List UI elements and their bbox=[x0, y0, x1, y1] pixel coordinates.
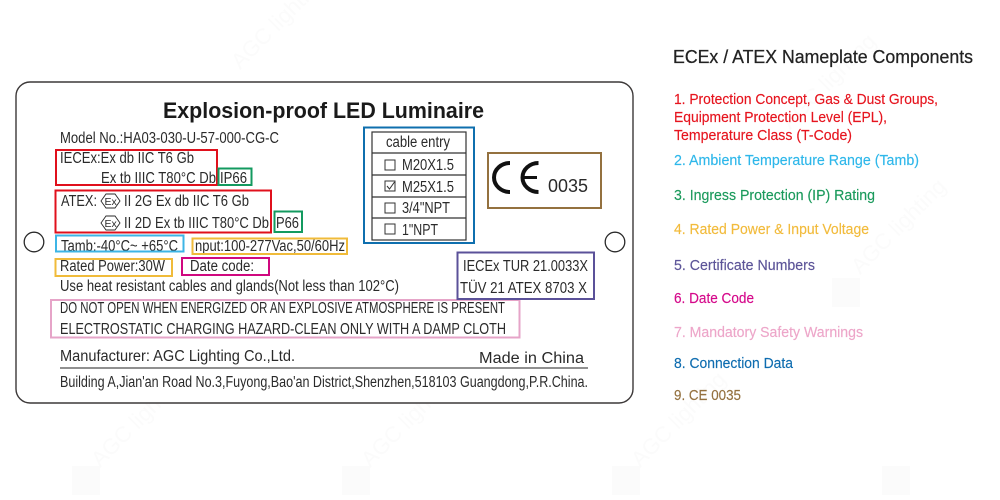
highlight: certificates bbox=[458, 252, 594, 299]
ATEX marking bbox=[61, 193, 269, 232]
legend item 9: 9. CE 0035 bbox=[674, 388, 741, 404]
ambient temperature text: Tamb:-40°C~ +65°C bbox=[61, 238, 178, 255]
legend item 8: 8. Connection Data bbox=[674, 356, 794, 372]
rated power text: Rated Power:30W bbox=[60, 258, 165, 275]
icon: Ex hexagon bbox=[101, 216, 120, 230]
legend item 1: Temperature Class (T-Code) bbox=[674, 128, 852, 144]
ATEX marking: II 2D Ex tb IIIC T80°C Db bbox=[124, 215, 269, 232]
nameplate panel bbox=[16, 82, 633, 403]
IECEx marking: Ex tb IIIC T80°C Db bbox=[101, 170, 216, 187]
mounting hole right bbox=[605, 232, 625, 252]
ATEX marking: ATEX: bbox=[61, 193, 97, 210]
legend panel bbox=[673, 47, 973, 404]
legend item 5: 5. Certificate Numbers bbox=[674, 258, 815, 274]
watermark pattern: AGC lighting bbox=[86, 367, 191, 472]
certificate numbers bbox=[460, 258, 589, 297]
highlight: IECEx protection bbox=[56, 150, 217, 185]
cable entry table: M25X1.5 bbox=[402, 179, 454, 196]
IECEx marking bbox=[60, 150, 216, 187]
highlight: Tamb bbox=[56, 236, 184, 252]
warning line two: ELECTROSTATIC CHARGING HAZARD-CLEAN ONLY WITH A DAMP CLOTH bbox=[60, 321, 506, 338]
legend item 1: 1. Protection Concept, Gas & Dust Groups, bbox=[674, 92, 938, 108]
highlight: date code bbox=[182, 258, 269, 275]
manufacturer rule bbox=[60, 367, 588, 369]
plate title: Explosion-proof LED Luminaire bbox=[163, 98, 484, 123]
model number: Model No.:HA03-030-U-57-000-CG-C bbox=[60, 130, 279, 147]
highlight: IP rating one bbox=[218, 168, 252, 185]
watermark pattern: AGC lighting bbox=[776, 29, 881, 134]
cable entry table: M20X1.5 bbox=[402, 157, 454, 174]
manufacturer: Manufacturer: AGC Lighting Co.,Ltd. bbox=[60, 348, 295, 365]
warning line one: DO NOT OPEN WHEN ENERGIZED OR AN EXPLOSIVE ATMOSPHERE IS PRESENT bbox=[60, 300, 505, 317]
certificate numbers: IECEx TUR 21.0033X bbox=[463, 258, 589, 275]
ATEX IP rating text: P66 bbox=[276, 215, 299, 232]
legend item 4: 4. Rated Power & Input Voltage bbox=[674, 222, 869, 238]
cable entry table: cable entry bbox=[386, 134, 450, 151]
made in China: Made in China bbox=[479, 350, 584, 367]
watermark pattern: AGC lighting bbox=[626, 367, 731, 472]
ATEX marking: II 2G Ex db IIC T6 Gb bbox=[124, 193, 249, 210]
watermark pattern: AGC lighting bbox=[356, 367, 461, 472]
cable entry table: 3/4"NPT bbox=[402, 200, 450, 217]
cable entry table: 1"NPT bbox=[402, 222, 438, 239]
IECEx marking: IECEx:Ex db IIC T6 Gb bbox=[60, 150, 194, 167]
highlight: input voltage bbox=[192, 238, 347, 254]
icon: Ex hexagon bbox=[101, 194, 120, 208]
address: Building A,Jian'an Road No.3,Fuyong,Bao'an District,Shenzhen,518103 Guangdong,P.R.China. bbox=[60, 374, 588, 391]
highlight: ATEX protection bbox=[56, 190, 271, 232]
highlight: safety warnings bbox=[51, 300, 520, 338]
legend item 6: 6. Date Code bbox=[674, 291, 754, 307]
highlight: CE bbox=[488, 153, 601, 208]
IECEx IP rating text: IP66 bbox=[220, 170, 247, 187]
highlight: IP rating two bbox=[274, 212, 302, 232]
date code text: Date code: bbox=[190, 258, 254, 275]
legend item 1 bbox=[674, 92, 938, 144]
plate outline bbox=[16, 82, 633, 403]
icon: Ex hexagon: Ex bbox=[104, 196, 118, 208]
icon: Ex hexagon: Ex bbox=[104, 218, 118, 230]
CE mark: 0035 bbox=[548, 175, 588, 196]
legend item 1: Equipment Protection Level (EPL), bbox=[674, 110, 887, 126]
legend heading: ECEx / ATEX Nameplate Components bbox=[673, 47, 973, 67]
mounting hole left bbox=[24, 232, 44, 252]
highlight: cable entry bbox=[364, 128, 474, 243]
cable note: Use heat resistant cables and glands(Not less than 102°C) bbox=[60, 278, 399, 295]
watermark pattern: AGC lighting bbox=[846, 174, 951, 279]
highlight: rated power bbox=[56, 259, 172, 276]
cable entry table bbox=[372, 132, 466, 240]
certificate numbers: TÜV 21 ATEX 8703 X bbox=[460, 279, 588, 297]
legend item 2: 2. Ambient Temperature Range (Tamb) bbox=[674, 153, 919, 169]
legend item 7: 7. Mandatory Safety Warnings bbox=[674, 325, 863, 341]
legend item 3: 3. Ingress Protection (IP) Rating bbox=[674, 188, 875, 204]
CE mark bbox=[494, 163, 588, 196]
input voltage text: nput:100-277Vac,50/60Hz bbox=[195, 238, 345, 255]
highlight boxes bbox=[51, 128, 601, 338]
